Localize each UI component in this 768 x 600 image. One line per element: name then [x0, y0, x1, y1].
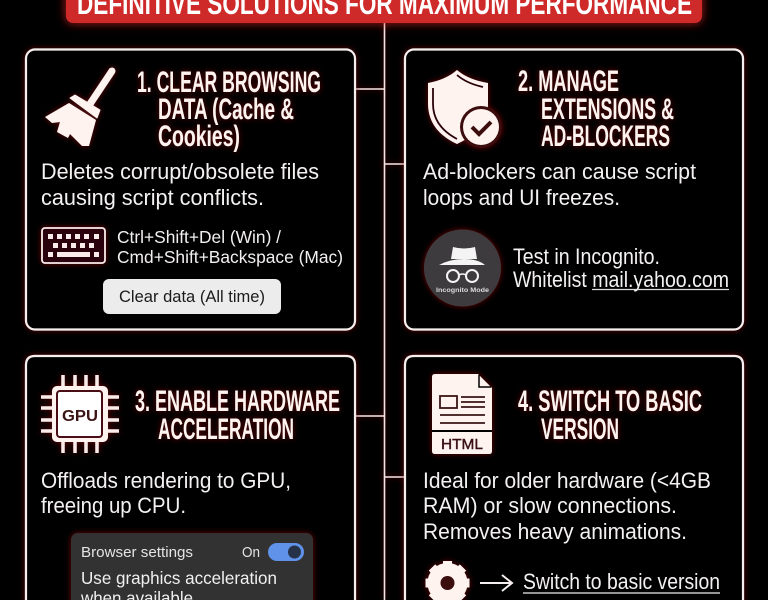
- text: clear data description: causing script conflicts.: [41, 185, 264, 210]
- heading: manage extensions: EXTENSIONS &: [541, 93, 674, 126]
- icon: keyboard: [42, 228, 105, 263]
- heading: basic version: [518, 385, 702, 446]
- panel: basic version: [405, 356, 743, 600]
- heading: manage extensions: 2. MANAGE: [518, 65, 619, 98]
- heading: basic version: VERSION: [541, 413, 619, 446]
- heading: manage extensions: AD-BLOCKERS: [541, 120, 670, 153]
- panel: clear browsing data: [26, 50, 355, 330]
- heading: clear browsing data: 1. CLEAR BROWSING: [137, 66, 321, 99]
- icon: incognito mode: Incognito Mode: [436, 287, 489, 294]
- panel: browser settings mockup: On: [242, 544, 260, 561]
- link: switch to basic version: Switch to basic version: [523, 569, 720, 594]
- heading: hardware acceleration: 3. ENABLE HARDWARE: [135, 385, 340, 418]
- icon: GPU chip: GPU: [62, 408, 98, 425]
- text: clear data description: [41, 159, 319, 210]
- text: GPU description: Offloads rendering to GPU,: [41, 468, 291, 493]
- text: incognito test: Whitelist mail.yahoo.com: [513, 267, 729, 292]
- text: keyboard shortcuts: Ctrl+Shift+Del (Win) /: [117, 227, 281, 247]
- arrow: [480, 575, 512, 591]
- heading: clear browsing data: Cookies): [158, 120, 240, 153]
- panel: manage extensions: [405, 50, 743, 330]
- icon: GPU chip: [41, 375, 119, 453]
- text: ad-blocker description: Ad-blockers can cause script: [423, 159, 696, 184]
- text: incognito test: [513, 244, 729, 292]
- text: basic version description: Ideal for older hardware (<4GB: [423, 468, 711, 493]
- heading: hardware acceleration: [135, 385, 340, 446]
- text: basic version description: [423, 468, 711, 544]
- text: basic version description: RAM) or slow connections.: [423, 493, 677, 518]
- panel: browser settings mockup: [71, 533, 313, 600]
- heading: hardware acceleration: ACCELERATION: [158, 413, 294, 446]
- panel: hardware acceleration: [26, 356, 355, 600]
- text: ad-blocker description: loops and UI freezes.: [423, 185, 620, 210]
- text: ad-blocker description: [423, 159, 696, 210]
- icon: incognito mode: [424, 230, 501, 306]
- text: GPU description: [41, 468, 291, 518]
- icon: HTML file: [432, 374, 492, 454]
- text: keyboard shortcuts: Cmd+Shift+Backspace (Mac): [117, 247, 343, 267]
- text: basic version description: Removes heavy animations.: [423, 519, 687, 544]
- text: GPU description: freeing up CPU.: [41, 493, 186, 518]
- icon: shield with check: [428, 70, 502, 148]
- text: incognito test: Test in Incognito.: [513, 244, 660, 269]
- panel: browser settings mockup: Use graphics acceleration: [81, 568, 277, 588]
- heading: manage extensions: [518, 65, 674, 153]
- icon: HTML file: HTML: [441, 436, 483, 453]
- text: clear data description: Deletes corrupt/obsolete files: [41, 159, 319, 184]
- button: clear data: Clear data (All time): [119, 287, 265, 306]
- icon: broom: [45, 71, 112, 146]
- toggle switch: [268, 543, 304, 561]
- text: keyboard shortcuts: [117, 227, 343, 267]
- timeline connector: [356, 22, 405, 600]
- icon: gear: [426, 561, 470, 600]
- heading: clear browsing data: DATA (Cache &: [158, 93, 294, 126]
- panel: browser settings mockup: Browser settings: [81, 544, 193, 561]
- heading: clear browsing data: [137, 66, 321, 153]
- button: clear data: [103, 279, 281, 314]
